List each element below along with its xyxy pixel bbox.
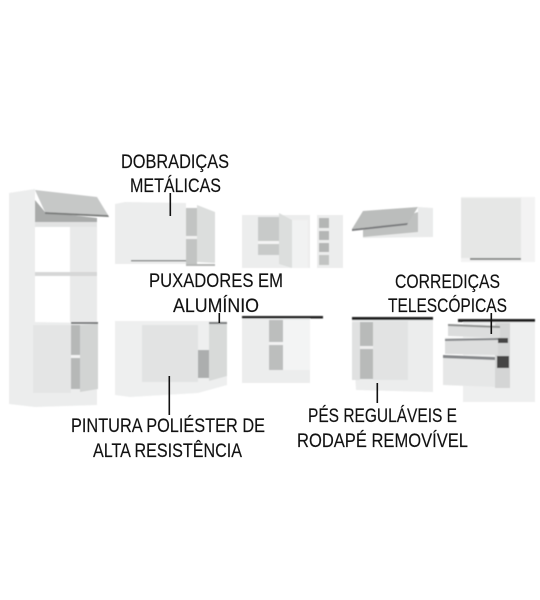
- label: Corrediças telescópicas: TELESCÓPICAS: [388, 295, 507, 317]
- label: Puxadores em alumínio: [149, 271, 283, 323]
- label: Puxadores em alumínio: PUXADORES EM: [149, 271, 283, 292]
- label: Dobradiças metálicas: DOBRADIÇAS: [121, 152, 229, 173]
- cabinet: flap door upper: [352, 207, 433, 238]
- cabinet: tall oven tower: [9, 189, 109, 407]
- label: Corrediças telescópicas: CORREDIÇAS: [395, 272, 500, 293]
- label: Pintura poliéster: ALTA RESISTÊNCIA: [93, 440, 242, 462]
- label: Pés reguláveis: [297, 383, 468, 452]
- cabinet: white upper door: [461, 197, 535, 262]
- label: Pintura poliéster: [71, 376, 265, 462]
- label: Puxadores em alumínio: ALUMÍNIO: [173, 296, 259, 317]
- cabinet: base with door: [352, 317, 433, 392]
- label: Corrediças telescópicas: [388, 272, 507, 334]
- cabinet: drawer unit: [443, 319, 535, 402]
- cabinet: base with open door: [242, 316, 323, 383]
- label: Pés reguláveis: RODAPÉ REMOVÍVEL: [297, 431, 468, 452]
- label: Dobradiças metálicas: [121, 152, 229, 216]
- cabinet: lower with open door: [115, 321, 227, 397]
- cabinet: upper with shelves: [242, 213, 310, 268]
- cabinet: upper with open door: [115, 202, 215, 266]
- cabinet: corner shelf unit: [317, 215, 343, 268]
- label: Dobradiças metálicas: METÁLICAS: [130, 176, 221, 197]
- label: Pés reguláveis: PÉS REGULÁVEIS E: [308, 406, 457, 427]
- label: Pintura poliéster: PINTURA POLIÉSTER DE: [71, 416, 265, 437]
